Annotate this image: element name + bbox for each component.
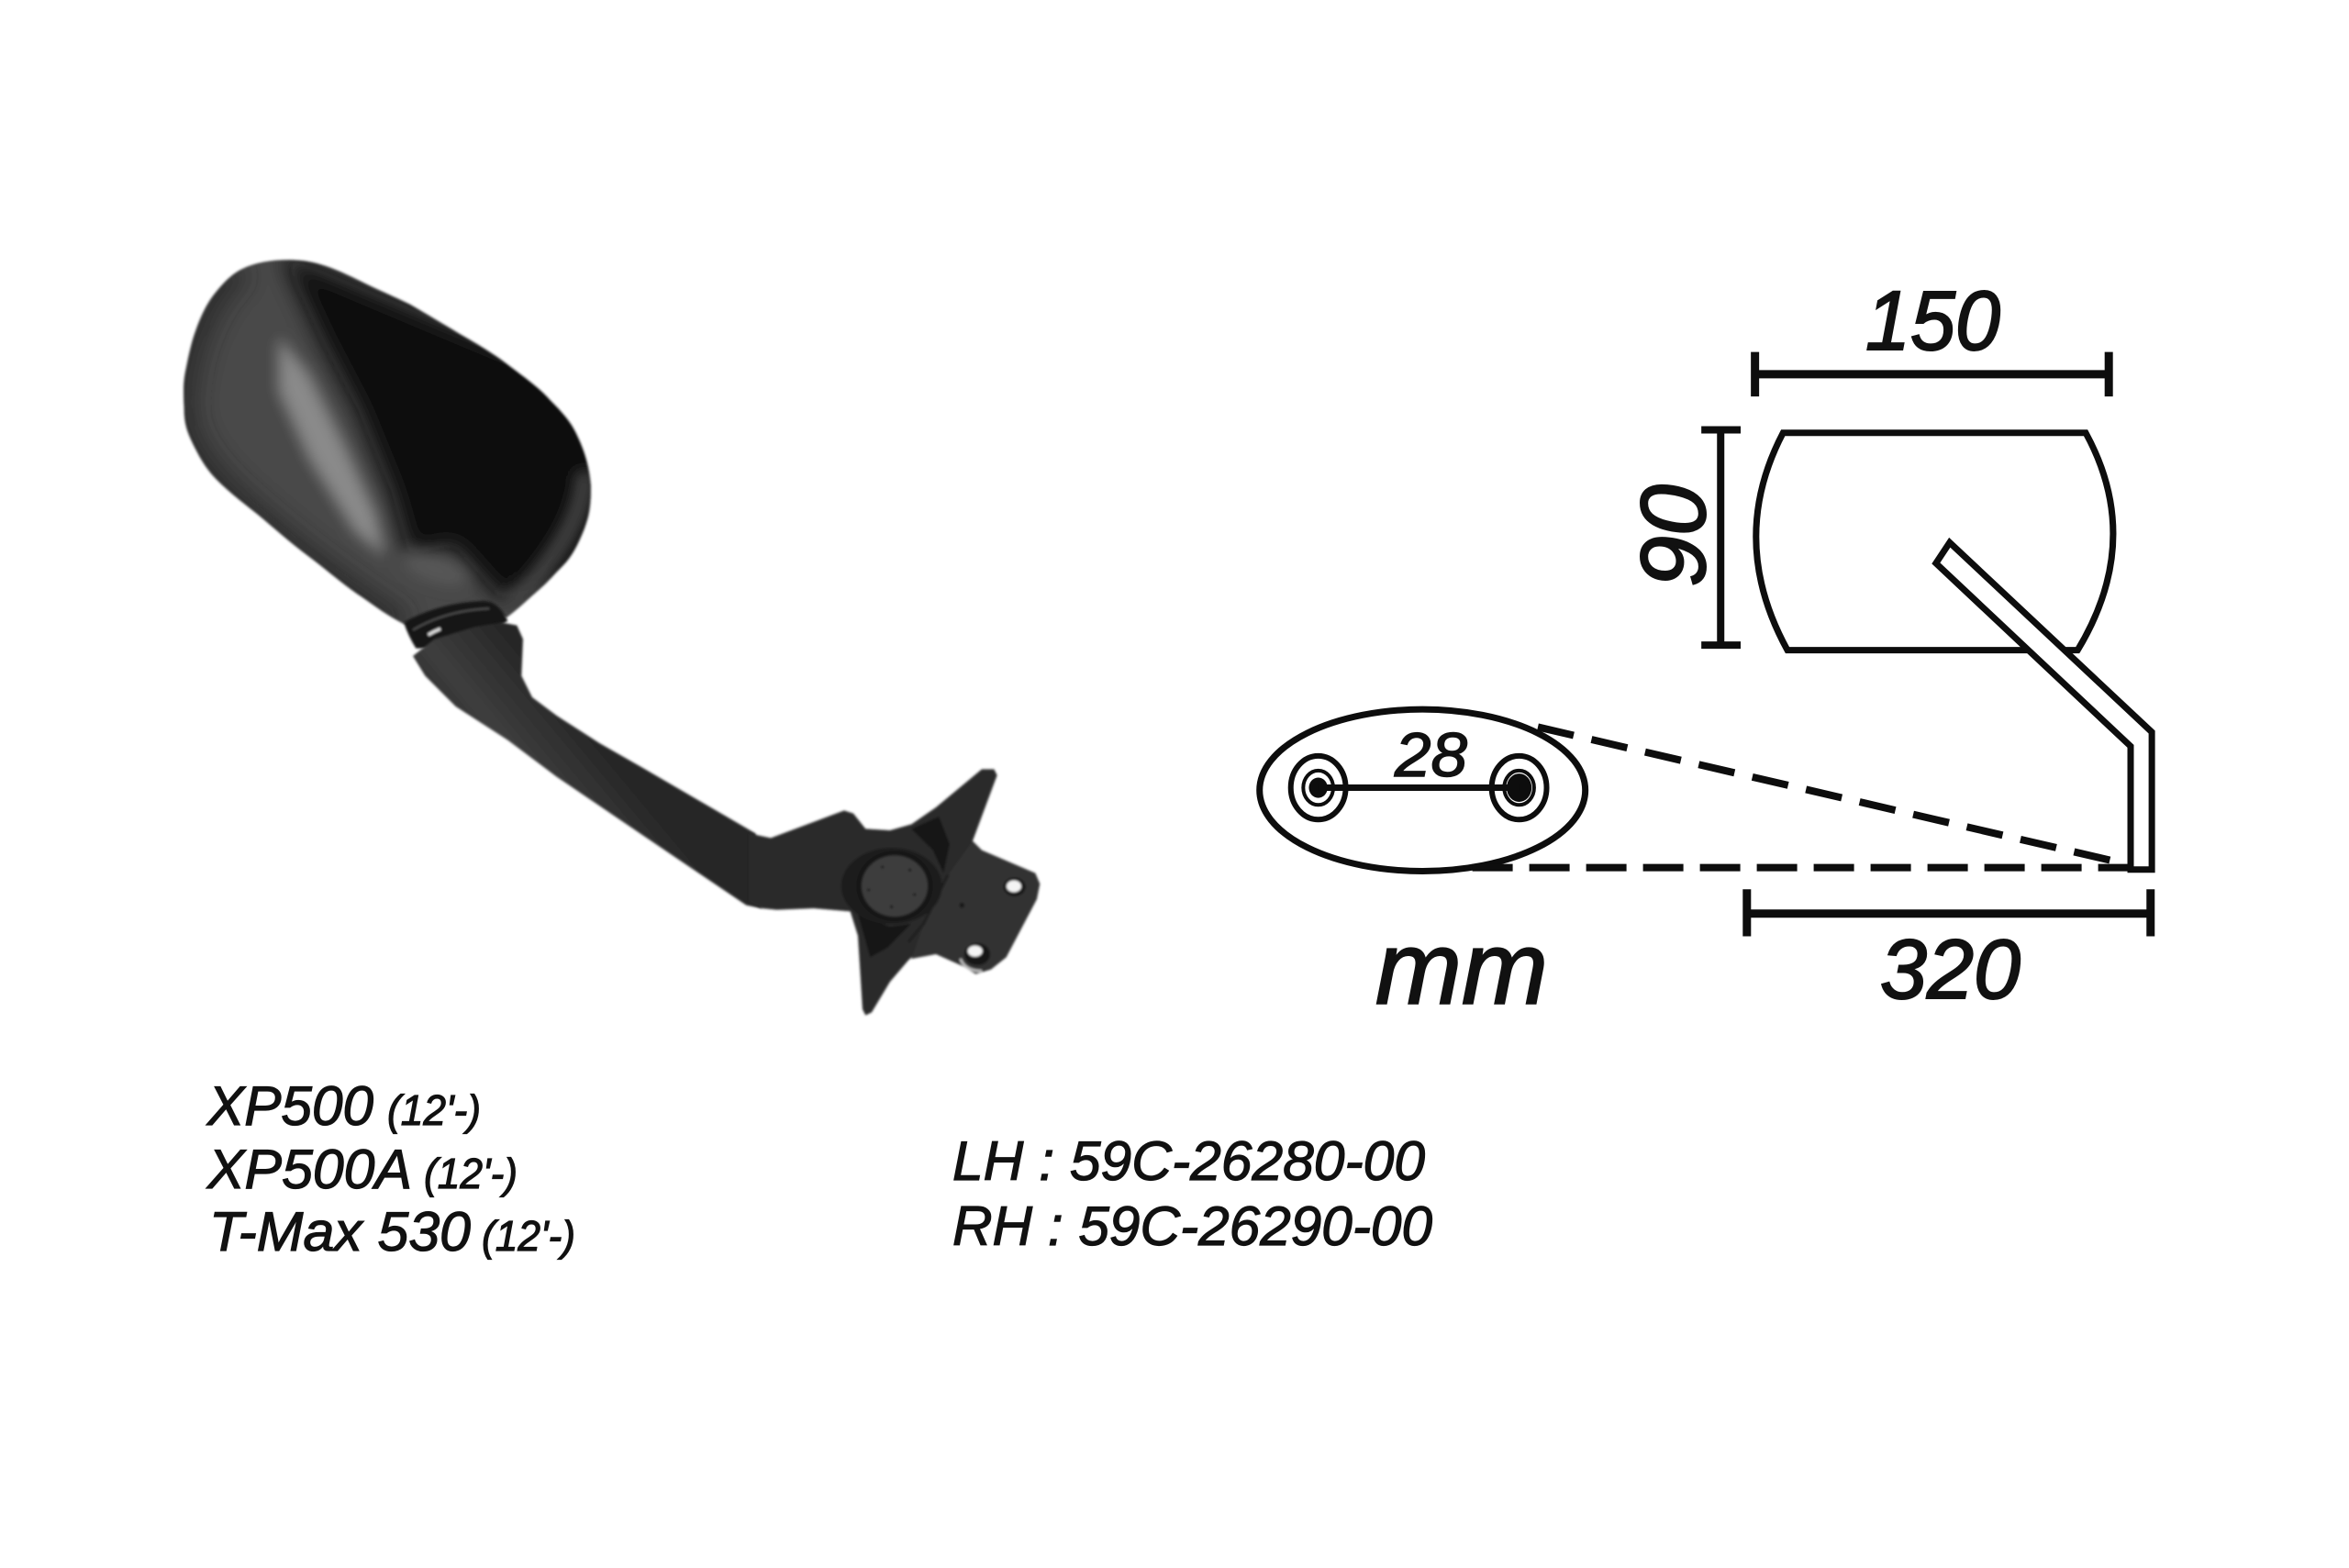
pivot knob [841,848,942,924]
mount ellipse [1260,709,1586,871]
dimension label 28: 28 [1394,720,1467,790]
mirror arm [413,622,762,908]
mirror photo [184,254,1040,1016]
arm outline [1936,542,2152,870]
model XP500: XP500 [206,1075,373,1137]
mounting bracket [750,769,1040,1016]
mirror housing [184,254,608,624]
dimension label 90: 90 [1622,484,1725,587]
unit label mm: mm [1375,911,1548,1026]
lower reflection [398,542,473,584]
star bracket and arm end [750,769,997,1016]
bolt holes [1004,878,1026,896]
mounting plate [911,841,1040,974]
crease highlight [278,337,385,557]
mounting holes [1291,756,1547,819]
model T-Max 530: T-Max 530 [209,1201,471,1262]
left hand part number: LH : 59C-26280-00 [952,1130,1425,1192]
year XP500A: (12'-) [424,1150,518,1197]
mirror outline [1756,433,2113,651]
dashed leader lines [1538,727,2124,863]
model list [206,1075,575,1262]
dimension 90 bar [1701,429,1741,645]
dimension 150 bar [1755,352,2109,396]
dimension label 150: 150 [1865,274,2000,368]
dark right side [282,254,608,599]
right hand part number: RH : 59C-26290-00 [952,1195,1432,1257]
year XP500: (12'-) [387,1086,481,1134]
part numbers [952,1130,1432,1257]
bracket crescents [911,817,950,873]
left rim shade [184,269,404,624]
neck ring [404,601,507,649]
year T-Max 530: (12'-) [482,1212,575,1260]
dimension 320 bar [1747,889,2151,937]
dimension diagram [1260,352,2152,937]
model XP500A: XP500A [206,1139,412,1200]
dimension label 320: 320 [1880,923,2021,1017]
right rim reflection [507,471,584,608]
